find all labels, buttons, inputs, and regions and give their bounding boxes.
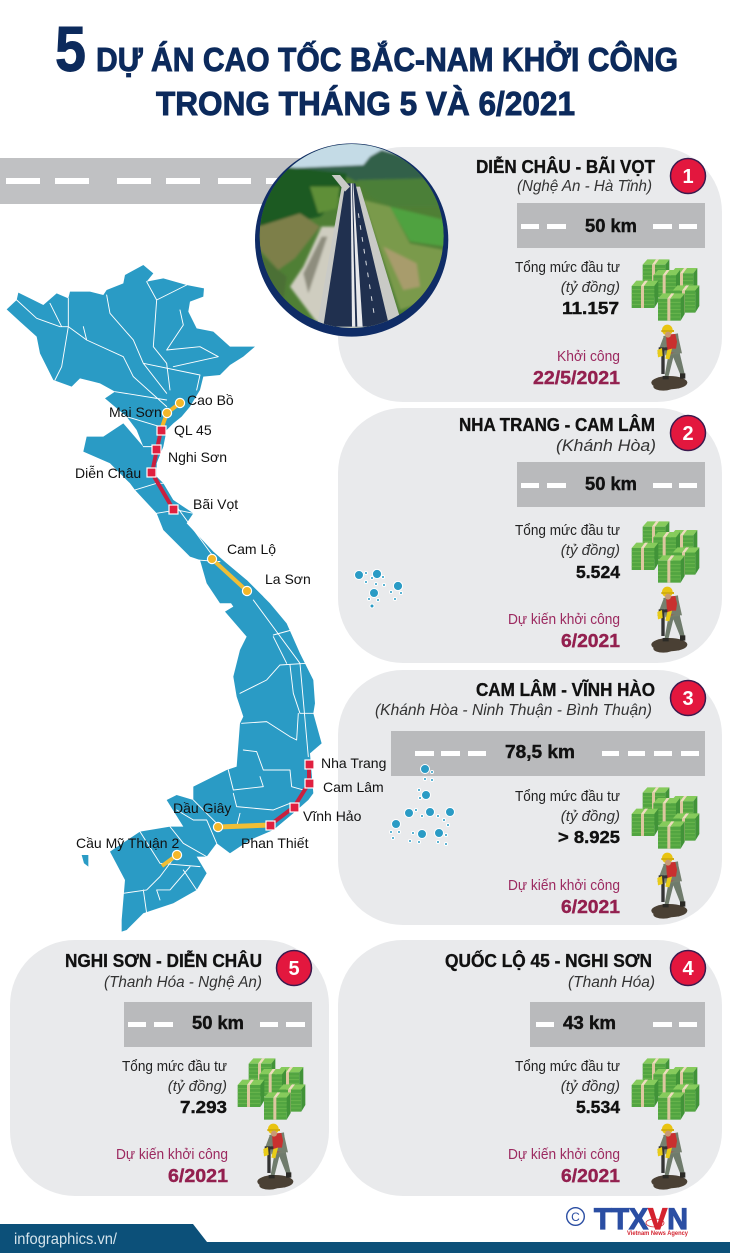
investment: 11.157 [562, 298, 619, 318]
map labels: Nghi Sơn [168, 449, 227, 465]
start date [508, 1147, 620, 1186]
badge 5: 5 [288, 958, 300, 980]
logo: TTXVN: Vietnam News Agency [627, 1230, 689, 1237]
panel: card 3 [338, 670, 722, 925]
road 78,5 km: 78,5 km [505, 742, 575, 762]
card 3 location: (Khánh Hòa - Ninh Thuận - Bình Thuận) [375, 702, 652, 719]
badge 2 [670, 416, 706, 450]
icon: worker [651, 1124, 687, 1190]
badge 2: 2 [682, 423, 694, 445]
start date [508, 612, 620, 651]
road 50 km [124, 1002, 312, 1047]
investment: Tổng mức đầu tư [515, 789, 620, 805]
road 50 km: 50 km [585, 216, 637, 236]
investment: Tổng mức đầu tư [122, 1059, 227, 1075]
badge 1: 1 [682, 166, 694, 188]
road 50 km [517, 462, 705, 507]
start date: Dự kiến khởi công [116, 1147, 228, 1163]
title: DỰ ÁN CAO TỐC BẮC-NAM KHỞI CÔNG [96, 40, 678, 78]
route: Dầu Giây - Phan Thiết [218, 825, 270, 827]
card 3 heading: CAM LÂM - VĨNH HÀO [476, 679, 655, 700]
map: north [7, 265, 263, 603]
card 5 heading: NGHI SƠN - DIỄN CHÂU [65, 950, 262, 971]
panel: card 1 [338, 147, 722, 402]
badge 5 [276, 950, 312, 986]
map labels: Diễn Châu [75, 465, 141, 481]
start date: 6/2021 [561, 897, 620, 917]
start date: 22/5/2021 [533, 368, 620, 388]
road 50 km: 50 km [192, 1013, 244, 1033]
photo: expressway [253, 140, 453, 337]
card 4 location: (Thanh Hóa) [568, 974, 655, 991]
investment [515, 523, 620, 582]
icon: worker [257, 1124, 293, 1190]
start date: 6/2021 [168, 1166, 228, 1186]
start date: 6/2021 [561, 1166, 620, 1186]
investment: 5.524 [576, 562, 620, 582]
investment: > 8.925 [558, 827, 620, 847]
card 1 location: (Nghệ An - Hà Tĩnh) [517, 178, 652, 195]
footer source: infographics.vn/ [14, 1231, 118, 1248]
investment: (tỷ đồng) [561, 1078, 620, 1095]
map labels: Cam Lộ [227, 541, 276, 557]
investment: Tổng mức đầu tư [515, 1059, 620, 1075]
start date [116, 1147, 228, 1186]
icon: money [238, 1058, 305, 1120]
title: 5 [55, 13, 86, 85]
panel: card 2 [338, 408, 722, 663]
route: Nha Trang - Phan Thiết [270, 764, 309, 825]
investment: Tổng mức đầu tư [515, 523, 620, 539]
road 78,5 km [391, 731, 705, 776]
investment: Tổng mức đầu tư [515, 260, 620, 276]
panel: card 4 [338, 940, 722, 1196]
badge 3 [670, 680, 706, 716]
map labels: Vĩnh Hảo [303, 808, 362, 824]
start date: Khởi công [557, 349, 620, 365]
card 4 heading: QUỐC LỘ 45 - NGHI SƠN [445, 950, 652, 971]
route: Cao Bồ - Mai Sơn - QL 45 [161, 403, 180, 430]
start date: Dự kiến khởi công [508, 878, 620, 894]
square markers [147, 426, 314, 830]
icon: money [632, 787, 699, 849]
badge 3: 3 [682, 688, 694, 710]
start date: 6/2021 [561, 631, 620, 651]
title: TRONG THÁNG 5 VÀ 6/2021 [156, 85, 575, 122]
map labels: Cam Lâm [323, 779, 384, 795]
investment: (tỷ đồng) [561, 279, 620, 296]
icon: money [632, 1058, 699, 1120]
footer bar [0, 1224, 730, 1253]
card 2 location: (Khánh Hòa) [556, 436, 656, 455]
card 2 heading: NHA TRANG - CAM LÂM [459, 414, 655, 435]
investment [515, 1059, 620, 1117]
road 50 km [517, 203, 705, 248]
map labels: Dầu Giây [173, 800, 231, 816]
card 5 location: (Thanh Hóa - Nghệ An) [104, 974, 262, 991]
logo: TTXVN: TTXVN [594, 1203, 688, 1236]
islands: Trường Sa [390, 764, 454, 846]
route: Cam Lộ - La Sơn [212, 559, 247, 591]
start date [533, 349, 620, 388]
route: Cầu Mỹ Thuận 2 [162, 855, 177, 866]
icon: worker [651, 325, 687, 391]
panel: card 5 [10, 940, 329, 1196]
investment: (tỷ đồng) [561, 542, 620, 559]
logo: TTXVN: C [571, 1210, 580, 1224]
investment [122, 1059, 227, 1117]
route markers [162, 398, 252, 860]
badge 4: 4 [682, 958, 694, 980]
map labels: QL 45 [174, 422, 212, 438]
road 43 km [530, 1002, 705, 1047]
icon: money [632, 259, 699, 321]
start date: Dự kiến khởi công [508, 1147, 620, 1163]
map: south [82, 580, 322, 932]
map labels: Nha Trang [321, 755, 386, 771]
start date: Dự kiến khởi công [508, 612, 620, 628]
investment: (tỷ đồng) [168, 1078, 227, 1095]
badge 4 [670, 950, 706, 986]
card 1 heading: DIỄN CHÂU - BÃI VỌT [476, 156, 655, 177]
map labels: Mai Sơn [109, 404, 162, 420]
badge 1 [670, 158, 706, 194]
route: QL 45 - Nghi Sơn - Diễn Châu - Bãi Vọt [152, 430, 173, 509]
start date [508, 878, 620, 917]
map of Vietnam [7, 265, 386, 932]
road 43 km: 43 km [563, 1013, 616, 1033]
investment: (tỷ đồng) [561, 808, 620, 825]
icon: money [632, 521, 699, 583]
investment: 7.293 [180, 1097, 227, 1117]
road 50 km: 50 km [585, 474, 637, 494]
title [55, 13, 678, 122]
map labels: Phan Thiết [241, 835, 309, 851]
map labels: Cao Bồ [187, 392, 234, 408]
investment [515, 789, 620, 847]
map labels [75, 392, 386, 851]
map labels: Cầu Mỹ Thuận 2 [76, 835, 179, 851]
investment: 5.534 [576, 1097, 620, 1117]
investment [515, 260, 620, 318]
top road stripe [0, 158, 300, 204]
islands: Hoàng Sa [354, 569, 403, 608]
map labels: Bãi Vọt [193, 496, 238, 512]
map labels: La Sơn [265, 571, 311, 587]
icon: worker [651, 853, 687, 919]
icon: worker [651, 587, 687, 653]
